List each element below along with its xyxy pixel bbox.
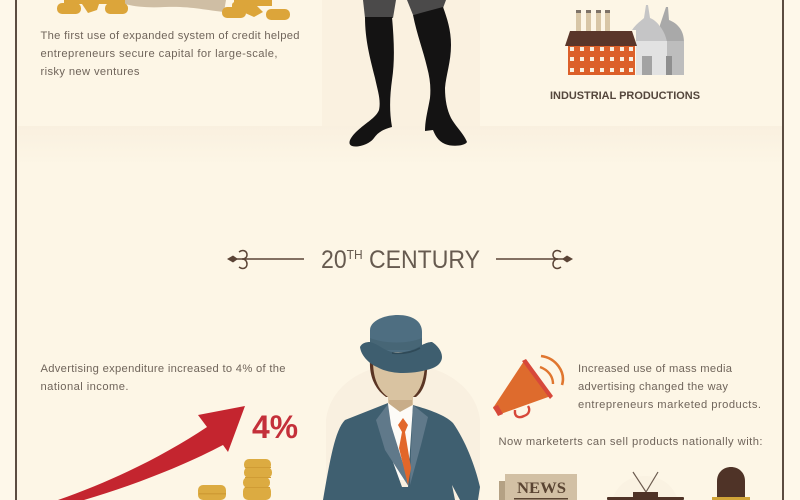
text: advertising expenditure <box>40 363 286 393</box>
hair <box>370 360 427 397</box>
lapels <box>376 404 409 487</box>
label: industrial productions: INDUSTRIAL PRODUCTIONS <box>550 90 700 102</box>
backdrop halo <box>326 364 480 500</box>
text: credit description: risky new ventures <box>40 66 140 78</box>
stat: 4 percent: 4% <box>252 409 298 445</box>
suit jacket <box>323 403 480 500</box>
title text: CENTURY <box>363 246 480 274</box>
text: credit description: entrepreneurs secure capital for large-scale, <box>40 48 278 60</box>
text: advertising expenditure: national income. <box>40 381 128 393</box>
icon: microphone <box>712 467 750 500</box>
text: credit description <box>40 30 300 78</box>
text: sell nationally: Now marketerts can sell products nationally with: <box>498 436 762 448</box>
chart: rising red arrow <box>58 406 245 500</box>
figure: 20th century businessman <box>323 315 480 500</box>
title text: 20 <box>321 246 349 274</box>
icon: factory with silos <box>565 5 684 75</box>
icon: megaphone <box>493 356 563 417</box>
icon: coin stacks <box>198 459 272 500</box>
face and neck <box>373 360 425 412</box>
icon: newspaper <box>499 474 577 500</box>
text: mass media: advertising changed the way <box>578 381 728 393</box>
icon: television <box>607 472 684 500</box>
text: advertising expenditure: Advertising expenditure increased to 4% of the <box>40 363 286 375</box>
text: credit description: The first use of expanded system of credit helped <box>40 30 300 42</box>
text: mass media: Increased use of mass media <box>578 363 733 375</box>
panel: 19th century backdrop <box>18 0 782 166</box>
tie <box>398 418 411 485</box>
ornament: left trident <box>227 251 304 268</box>
title text: TH <box>347 247 363 262</box>
text: mass media: entrepreneurs marketed products. <box>578 399 761 411</box>
icon: newspaper: NEWS <box>517 480 566 497</box>
hat <box>360 315 442 373</box>
text: mass media <box>498 363 762 448</box>
heading: 20th century <box>227 246 573 274</box>
figure: 19th century man legs and boots <box>349 0 467 147</box>
shirt <box>388 403 420 480</box>
ornament: right trident <box>496 251 573 268</box>
icon: money sack and coins <box>57 0 290 20</box>
